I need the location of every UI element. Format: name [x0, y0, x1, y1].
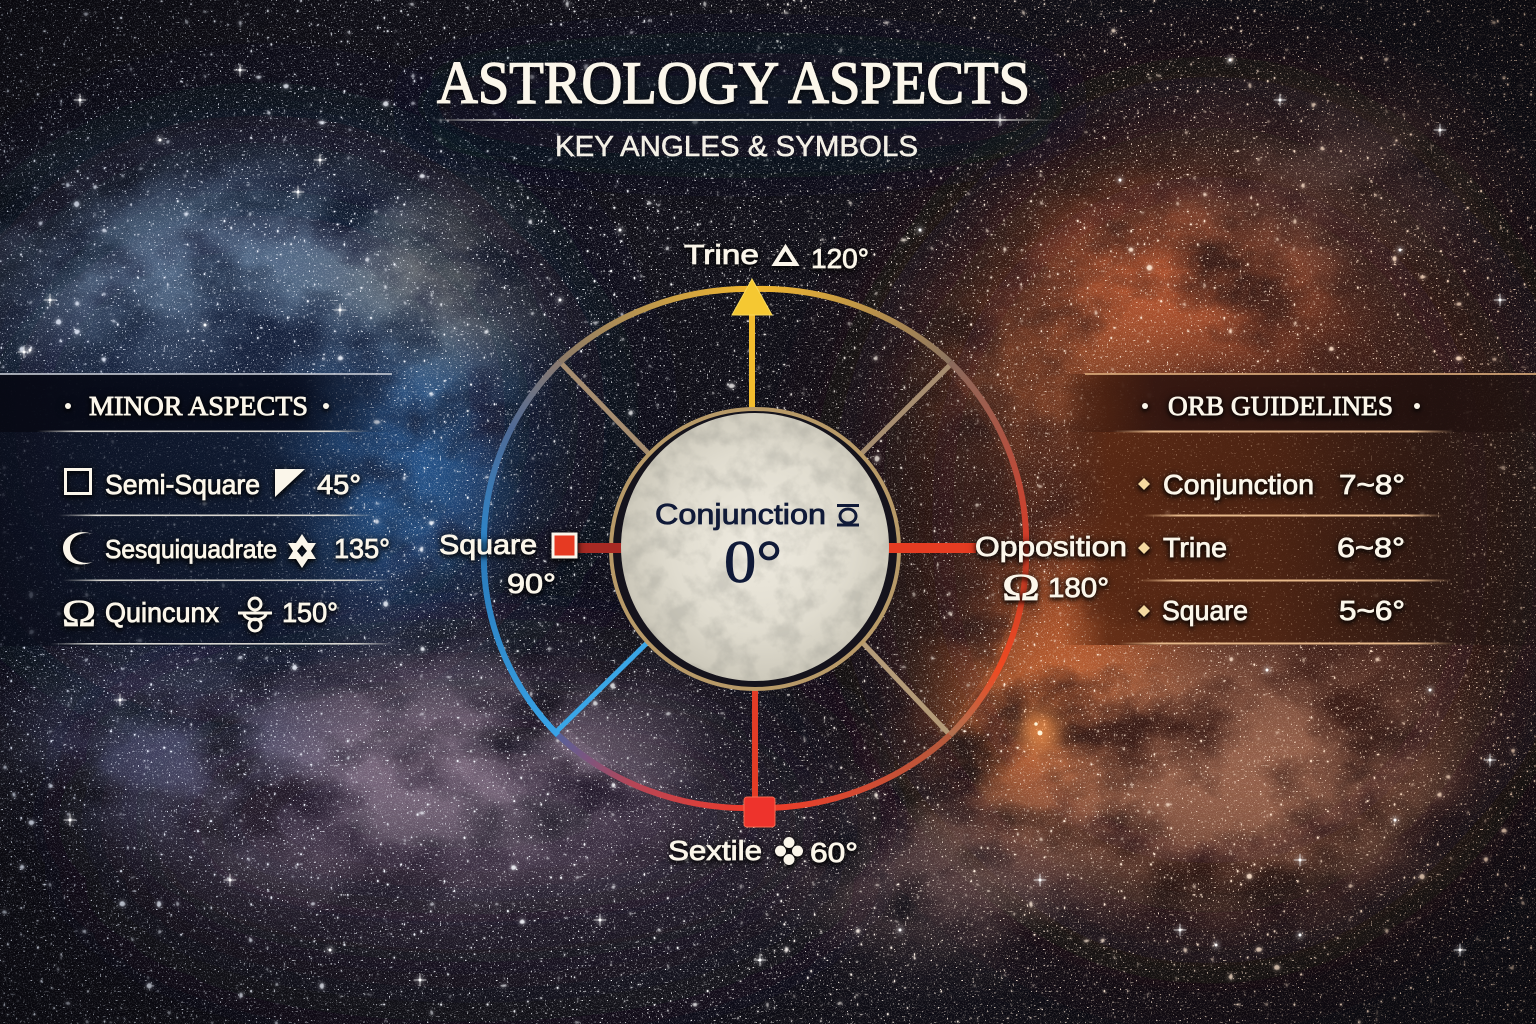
row: quincunx [62, 593, 338, 635]
label: trine [684, 239, 869, 274]
panel background [1060, 373, 1536, 645]
row: conjunction orb: 7~8° [1339, 469, 1405, 500]
label: opposition: Opposition [975, 531, 1127, 562]
row: trine orb: 6~8° [1337, 532, 1405, 563]
label: trine: Trine [684, 239, 759, 270]
heading: minor aspects: MINOR ASPECTS [89, 391, 308, 421]
row: sesquiquadrate [63, 532, 390, 568]
label: sextile: 60° [810, 837, 858, 868]
heading: orb guidelines: ORB GUIDELINES [1168, 391, 1393, 421]
row: sesquiquadrate: Sesquiquadrate [105, 534, 277, 564]
row: semi-square: 45° [317, 469, 361, 500]
row: trine orb [1138, 532, 1405, 563]
row: semi-square [66, 469, 361, 500]
row: semi-square: Semi-Square [105, 469, 260, 500]
row: quincunx: 150° [282, 597, 338, 628]
row: quincunx: Ω [62, 593, 96, 635]
row: conjunction orb: Conjunction [1163, 469, 1314, 500]
row: conjunction orb [1138, 469, 1405, 500]
center label: conjunction: 0° [724, 529, 782, 595]
title: ASTROLOGY ASPECTS [437, 50, 1030, 116]
center label: conjunction: Conjunction [655, 499, 826, 531]
panel background [0, 373, 396, 646]
marker: red square bottom [744, 797, 775, 827]
label: square: 90° [507, 568, 556, 599]
outer ring [484, 289, 1026, 808]
row: sesquiquadrate: 135° [334, 533, 390, 564]
subtitle: KEY ANGLES & SYMBOLS [555, 131, 918, 163]
label: sextile [668, 835, 858, 868]
row: quincunx: Quincunx [105, 597, 219, 628]
inner ring [611, 409, 899, 689]
row: trine orb: Trine [1163, 532, 1227, 563]
label: square [439, 529, 576, 599]
label: trine: 120° [811, 243, 869, 274]
spokes [555, 312, 950, 800]
row: square orb: 5~6° [1339, 595, 1405, 626]
label: opposition [975, 531, 1127, 609]
panel: minor aspects [0, 373, 396, 646]
center label: conjunction [655, 499, 859, 595]
aspect wheel [484, 279, 1026, 827]
label: opposition: 180° [1048, 572, 1109, 603]
marker: arrow up [732, 279, 772, 315]
label: square: Square [439, 529, 537, 560]
horizontal spokes [578, 543, 976, 553]
label: opposition: Ω [1002, 567, 1040, 609]
row: square orb: Square [1162, 595, 1248, 626]
moon [621, 413, 889, 681]
panel: orb guidelines [1060, 373, 1536, 645]
label: sextile: Sextile [668, 835, 762, 866]
row: square orb [1138, 595, 1405, 626]
